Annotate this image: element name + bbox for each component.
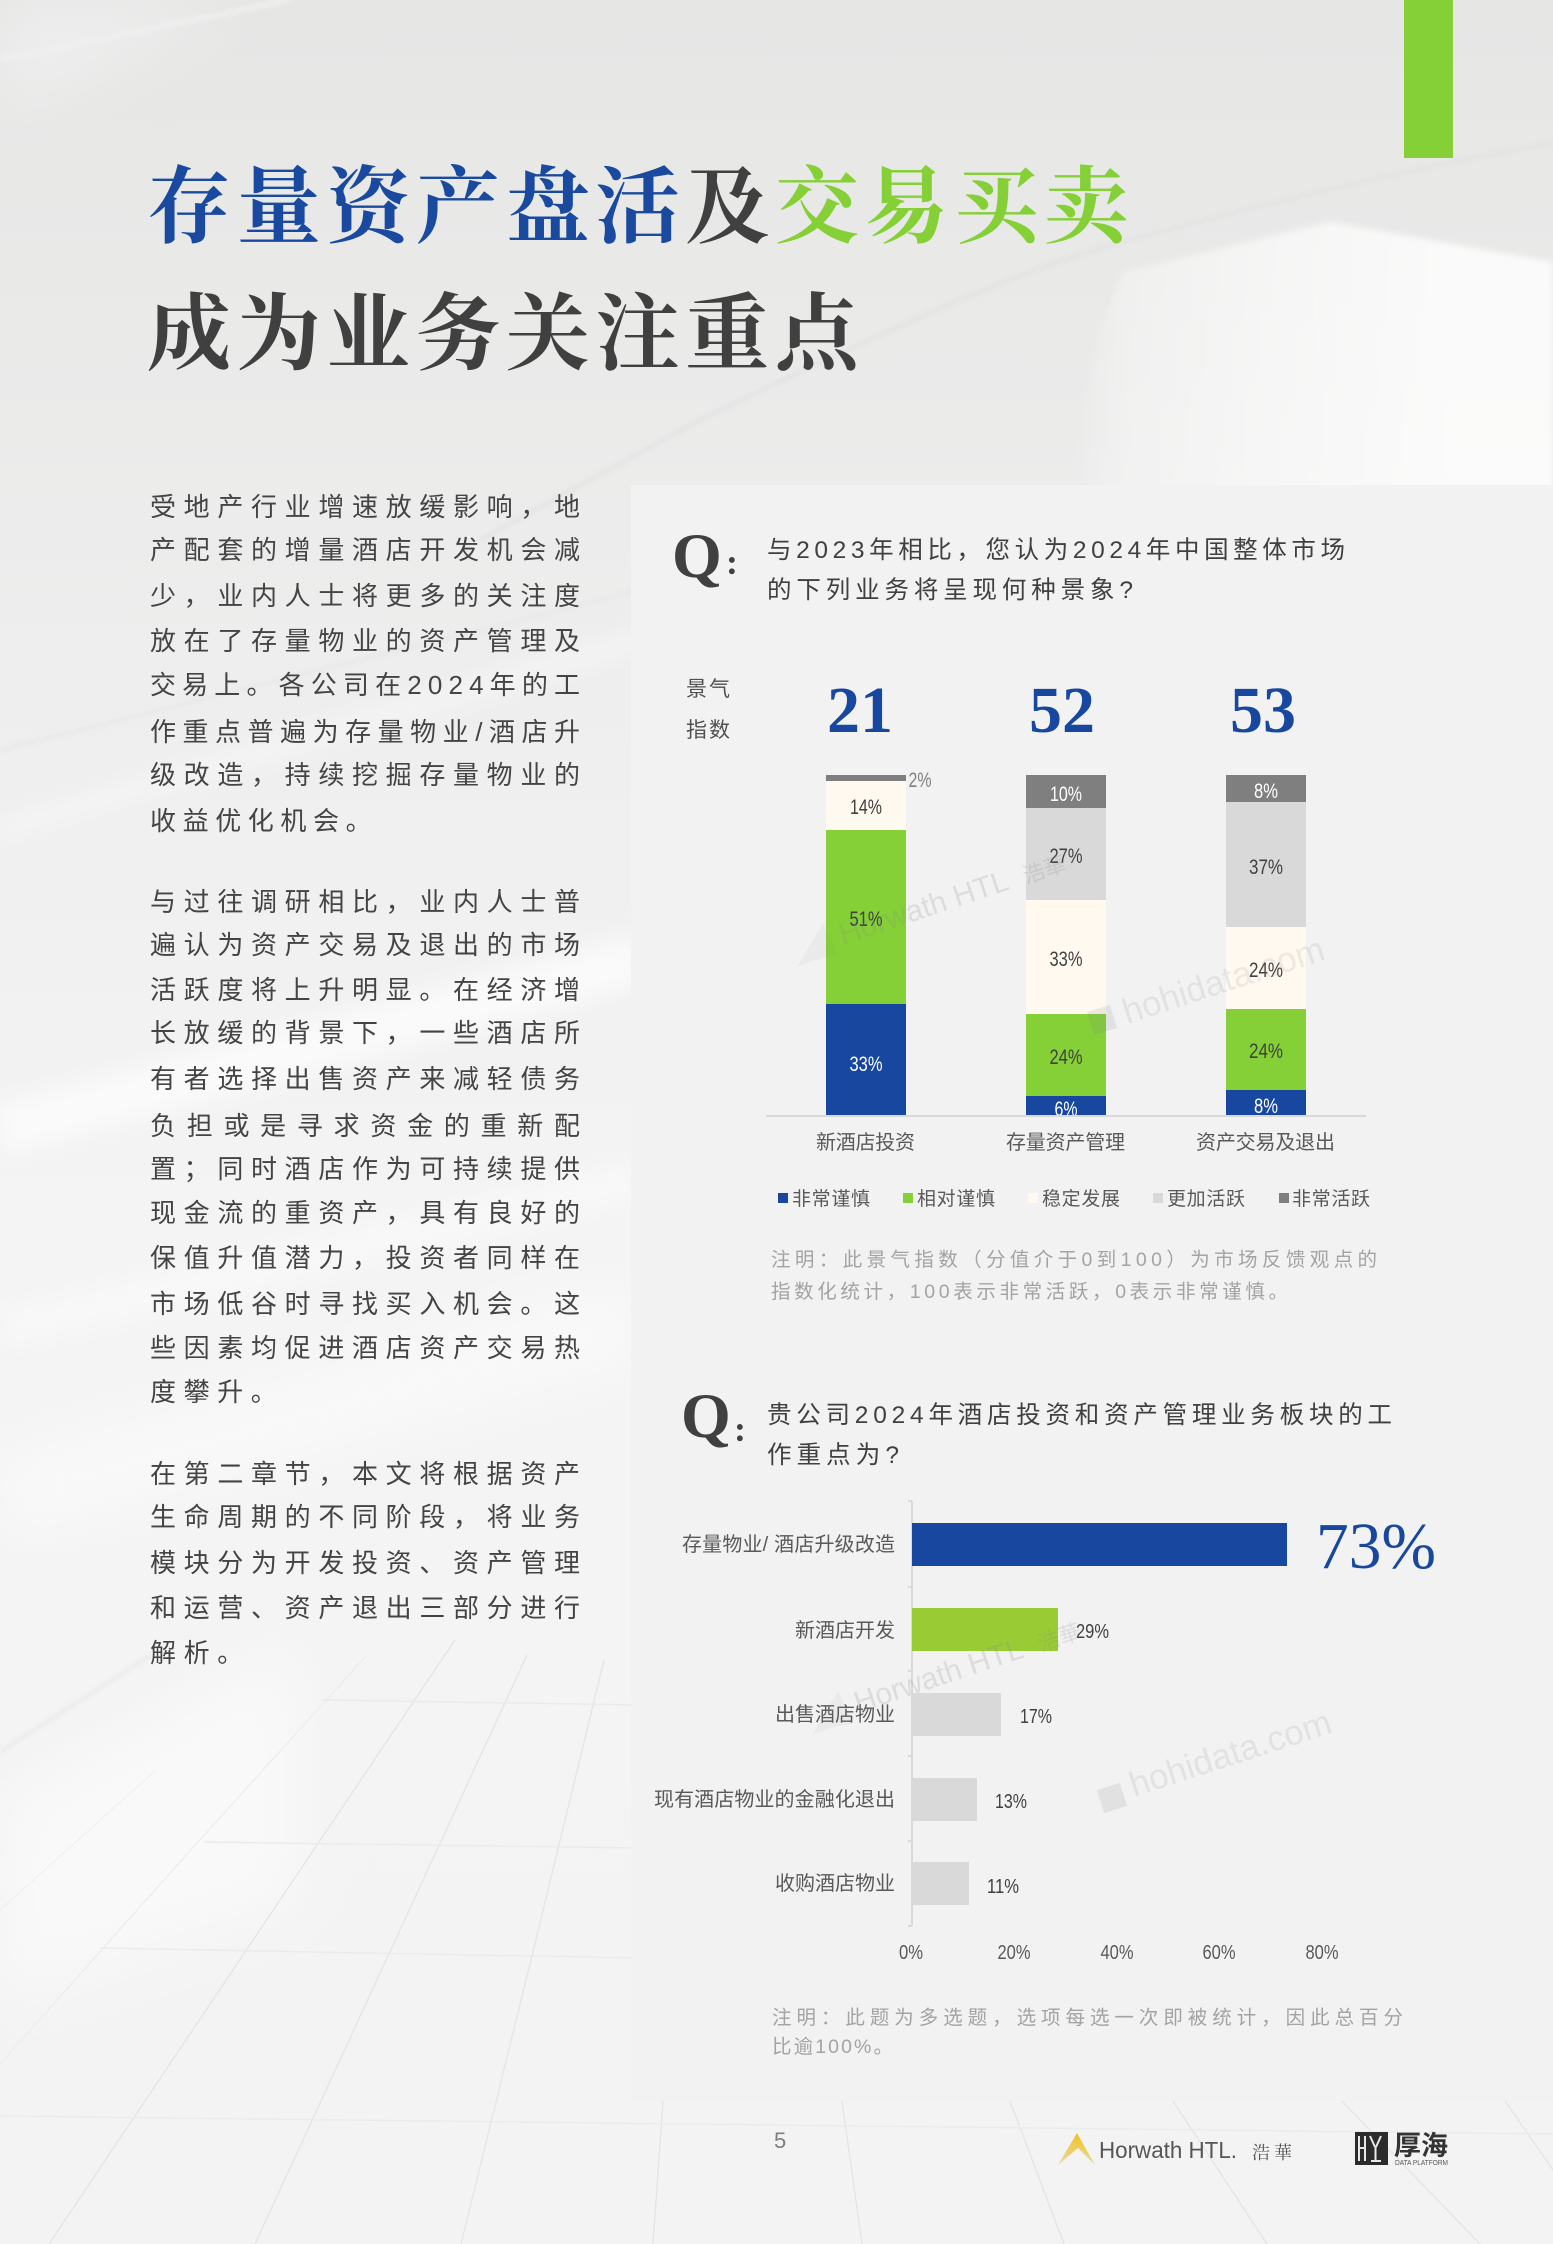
- paragraph 2: 长放缓的背景下，一些酒店所: [150, 1018, 580, 1048]
- paragraph 2: 有者选择出售资产来减轻债务: [150, 1064, 580, 1094]
- category labels: 存量资产管理: [1006, 1131, 1125, 1154]
- bar: 存量资产管理: 24%: [1050, 1046, 1082, 1069]
- logo: Horwath HTL: Horwath HTL.: [1099, 2137, 1237, 2163]
- watermarks chart 2: Horwath HTL 浩華: [850, 1613, 1085, 1720]
- watermarks chart 2: [812, 1613, 1336, 1813]
- bar: 新酒店投资: 33%: [850, 1053, 882, 1076]
- bar: 存量资产管理: [1026, 775, 1106, 1121]
- bar: 资产交易及退出: 37%: [1249, 856, 1283, 879]
- index values: 52: [1029, 674, 1095, 747]
- note 1: 指数化统计，100表示非常活跃，0表示非常谨慎。: [771, 1281, 1288, 1303]
- paragraph 1: 产配套的增量酒店开发机会减: [150, 535, 580, 565]
- question 1 heading: [672, 520, 1345, 604]
- paragraph 1: [150, 492, 580, 836]
- x axis labels: 40%: [1100, 1942, 1134, 1964]
- question 1 heading: :: [726, 542, 738, 582]
- bar: 存量资产管理: 27%: [1050, 845, 1082, 868]
- values: 29%: [1076, 1621, 1109, 1643]
- category labels: [654, 1533, 895, 1895]
- bar: 新酒店投资: 51%: [850, 908, 882, 931]
- bar: 资产交易及退出: 8%: [1254, 780, 1278, 803]
- question 2 heading: 作重点为?: [767, 1441, 899, 1469]
- logo: 厚海 data platform: DATA PLATFORM: [1395, 2160, 1448, 2167]
- category labels: 收购酒店物业: [775, 1872, 895, 1895]
- green accent bar: [1404, 0, 1453, 158]
- x axis labels: 0%: [899, 1942, 923, 1964]
- legend: 非常谨慎: [792, 1188, 870, 1210]
- watermarks chart 1: [797, 845, 1329, 1035]
- note 2: 比逾100%。: [772, 2036, 893, 2058]
- category labels: 资产交易及退出: [1196, 1131, 1335, 1154]
- paragraph 3: 生命周期的不同阶段，将业务: [150, 1502, 580, 1532]
- bar: 资产交易及退出: 8%: [1254, 1095, 1278, 1118]
- x axis labels: [899, 1942, 1339, 1964]
- stacked bar chart: [766, 769, 1366, 1154]
- page number: 5: [774, 2128, 786, 2153]
- question 1 heading: 与2023年相比，您认为2024年中国整体市场: [767, 536, 1345, 564]
- bar: 存量资产管理: 33%: [1050, 948, 1082, 971]
- question 2 heading: Q: [681, 1380, 731, 1451]
- legend: [778, 1188, 1370, 1210]
- logo: Horwath HTL: 浩華: [1252, 2139, 1292, 2165]
- watermarks chart 1: hohidata.com: [1117, 930, 1329, 1032]
- category labels: 现有酒店物业的金融化退出: [654, 1788, 895, 1811]
- paragraph 2: 市场低谷时寻找买入机会。这: [150, 1289, 580, 1319]
- note 2: 注明：此题为多选题，选项每选一次即被统计，因此总百分: [772, 2007, 1403, 2029]
- sentiment index label: [686, 678, 730, 742]
- horizontal bar chart: [654, 1501, 1436, 1964]
- bar: 资产交易及退出: 24%: [1249, 959, 1283, 982]
- note 1: [771, 1249, 1377, 1303]
- paragraph 2: 置；同时酒店作为可持续提供: [150, 1154, 580, 1184]
- right panel: [631, 485, 1553, 2101]
- bar: 新酒店投资: 2%: [908, 769, 932, 792]
- paragraph 2: 保值升值潜力，投资者同样在: [150, 1243, 580, 1273]
- paragraph 1: 收益优化机会。: [150, 806, 378, 836]
- note 1: 注明：此景气指数（分值介于0到100）为市场反馈观点的: [771, 1249, 1377, 1271]
- values: 11%: [987, 1876, 1019, 1898]
- bar: 新酒店投资: 14%: [850, 796, 882, 819]
- sentiment index label: 景气: [686, 678, 730, 701]
- question 1 heading: Q: [672, 520, 722, 591]
- paragraph 1: 作重点普遍为存量物业/酒店升: [150, 717, 580, 747]
- paragraph 2: 活跃度将上升明显。在经济增: [150, 975, 580, 1005]
- logo: 厚海 data platform: [1355, 2131, 1448, 2167]
- values: 17%: [1020, 1706, 1052, 1728]
- x axis labels: 80%: [1306, 1942, 1339, 1964]
- title: 成为业务关注重点: [147, 267, 865, 388]
- logo: 厚海 data platform: 厚海: [1394, 2131, 1448, 2161]
- paragraph 2: 度攀升。: [150, 1377, 284, 1407]
- note 2: [772, 2007, 1403, 2058]
- paragraph 3: 在第二章节，本文将根据资产: [150, 1459, 580, 1489]
- sentiment index label: 指数: [686, 719, 730, 742]
- title: [147, 140, 1134, 388]
- legend: 稳定发展: [1042, 1188, 1120, 1210]
- paragraph 1: 交易上。各公司在2024年的工: [150, 670, 580, 700]
- question 1 heading: 的下列业务将呈现何种景象?: [767, 576, 1133, 604]
- paragraph 1: 放在了存量物业的资产管理及: [150, 626, 580, 656]
- logo: Horwath HTL: [1058, 2133, 1292, 2165]
- bar: 存量资产管理: 6%: [1054, 1098, 1078, 1121]
- x axis labels: 60%: [1202, 1942, 1236, 1964]
- paragraph 2: 现金流的重资产，具有良好的: [150, 1198, 580, 1228]
- paragraph 1: 级改造，持续挖掘存量物业的: [150, 760, 580, 790]
- category labels: [816, 1131, 1335, 1154]
- title: 存量资产盘活及交易买卖: [147, 140, 1134, 261]
- question 2 heading: 贵公司2024年酒店投资和资产管理业务板块的工: [767, 1401, 1392, 1429]
- values: 13%: [995, 1791, 1027, 1813]
- paragraph 2: [150, 887, 580, 1407]
- category labels: 新酒店投资: [816, 1131, 915, 1154]
- values: [987, 1621, 1109, 1898]
- axis: [908, 1501, 912, 1926]
- legend: 非常活跃: [1292, 1188, 1370, 1210]
- bar: 存量资产管理: 10%: [1050, 783, 1082, 806]
- index values: 21: [827, 674, 893, 747]
- highlight value: 73%: [1316, 1510, 1436, 1583]
- category labels: 新酒店开发: [795, 1619, 895, 1642]
- question 2 heading: :: [734, 1409, 746, 1449]
- paragraph 3: 和运营、资产退出三部分进行: [150, 1593, 580, 1623]
- question 2 heading: [681, 1380, 1392, 1469]
- paragraph 1: 少，业内人士将更多的关注度: [150, 581, 580, 611]
- paragraph 2: 与过往调研相比，业内人士普: [150, 887, 580, 917]
- paragraph 3: [150, 1459, 580, 1668]
- paragraph 2: 些因素均促进酒店资产交易热: [150, 1333, 580, 1363]
- paragraph 3: 模块分为开发投资、资产管理: [150, 1548, 580, 1578]
- index values: 53: [1230, 674, 1296, 747]
- bar: 新酒店投资: [826, 769, 932, 1116]
- bar: 资产交易及退出: 24%: [1249, 1040, 1283, 1063]
- paragraph 1: 受地产行业增速放缓影响，地: [150, 492, 580, 522]
- x axis labels: 20%: [998, 1942, 1031, 1964]
- bar: 资产交易及退出: [1226, 775, 1306, 1118]
- bars: [912, 1523, 1287, 1905]
- paragraph 2: 负担或是寻求资金的重新配: [150, 1111, 580, 1141]
- watermarks chart 2: hohidata.com: [1124, 1703, 1336, 1805]
- legend: 相对谨慎: [917, 1188, 995, 1210]
- category labels: 存量物业/ 酒店升级改造: [682, 1533, 895, 1556]
- legend: 更加活跃: [1167, 1188, 1245, 1210]
- category labels: 出售酒店物业: [775, 1703, 895, 1726]
- index values: [827, 674, 1296, 747]
- watermarks chart 1: Horwath HTL 浩華: [835, 845, 1070, 952]
- left body text: [150, 492, 580, 1668]
- paragraph 3: 解析。: [150, 1638, 251, 1668]
- paragraph 2: 遍认为资产交易及退出的市场: [150, 930, 580, 960]
